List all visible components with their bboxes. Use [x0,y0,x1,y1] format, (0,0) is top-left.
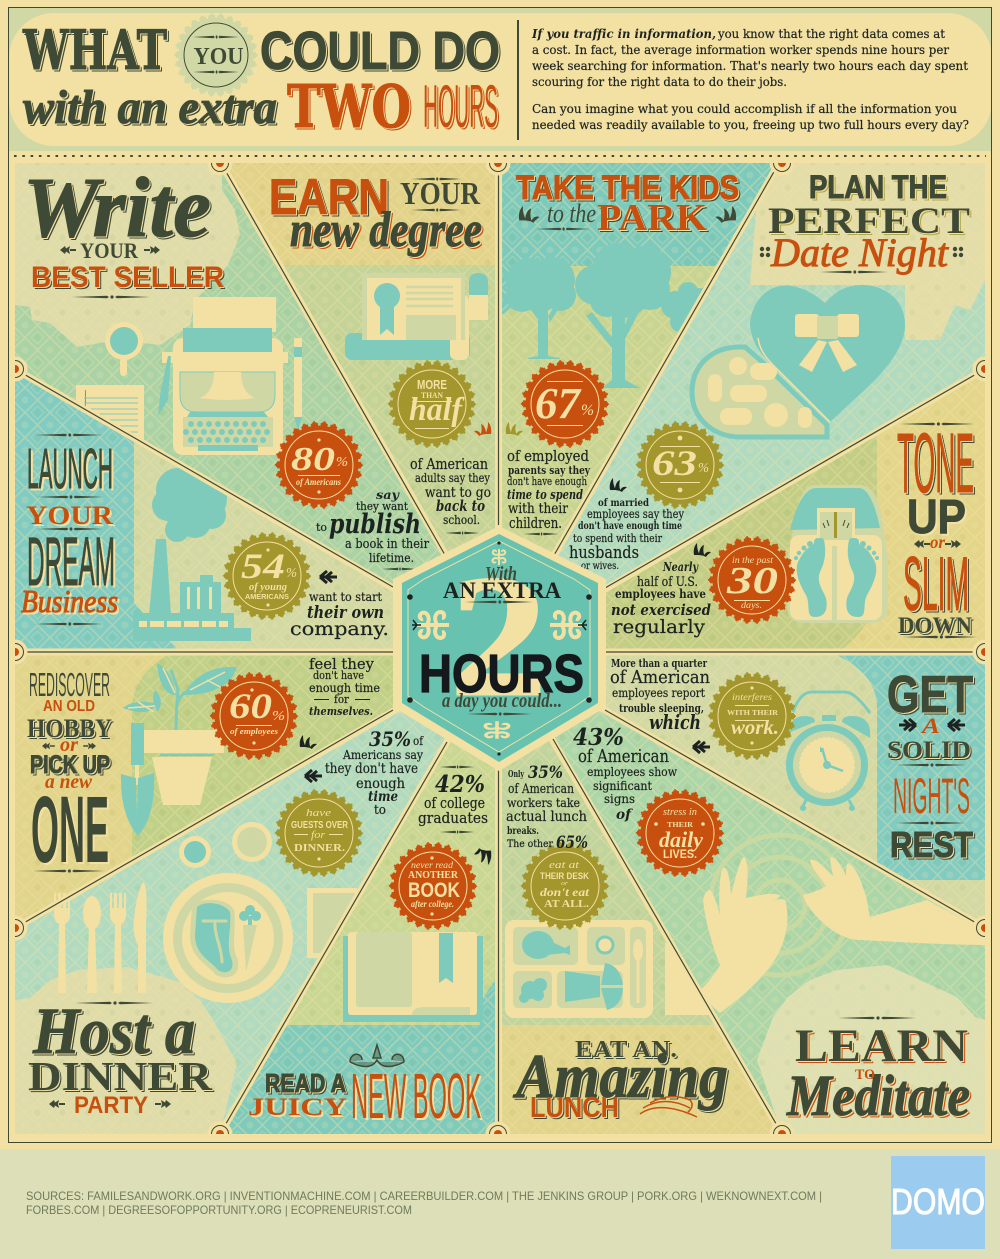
heading: write your best seller [23,159,224,299]
icon: glass [307,888,358,958]
stat text: time for themselves: feel they [309,655,375,673]
badge: have guests over for dinner: for [311,829,326,841]
intro text block: Can you imagine what you could accomplish if all the information you [532,101,957,116]
stat text: americans dinner guests: Americans say [342,748,423,762]
stat text: college graduates: graduates [418,809,488,827]
heading: host a dinner party: DINNER [28,1053,212,1099]
heading: take the kids to the park: PARK [597,197,707,239]
badge: eat at their desk: AT ALL. [544,898,589,910]
stat text: publish a book: say [376,488,400,502]
stat text: time to spend [507,447,590,536]
heading: rediscover an old hobby: or [60,734,78,756]
heading: write your best seller: Write [23,159,211,255]
stat text: time to spend: don't have enough [507,475,587,488]
panel: launch your dream business: DREAM [27,523,115,600]
badge: 80%: 80 [291,441,335,478]
stat text: time for themselves: themselves. [309,705,373,718]
title: what you could do with an extra two hours: with an extra [23,81,277,134]
stat text: publish a book: publish [329,509,421,540]
stat text: start their own company: want to start [309,590,382,604]
heading: plan the perfect date night: Date Night [770,230,949,275]
stat text: college graduates: 42% [435,771,485,798]
badge: you: YOU [194,44,244,70]
heading: read a juicy new book: JUICY [248,1094,347,1121]
stat text: actual lunch breaks: actual lunch [506,809,587,825]
arrow: pointing to dinner badge [305,770,322,782]
badge: never read another book: never read [411,860,454,870]
badge: have guests over for dinner: DINNER. [294,842,345,854]
heading: take the kids to the park [516,169,739,239]
badge: never read another book: ANOTHER [408,870,459,881]
badge: eat at their desk [522,842,608,930]
hub text [419,563,584,716]
badge: eat at their desk: eat at [549,859,580,871]
stat text: not exercised regularly: not exercised [611,601,711,619]
intro text block: week searching for information. That's nearly two hours each day spent [532,58,968,73]
sources text [26,1189,822,1217]
hub text: HOURS [419,644,584,704]
heading: host a dinner party: PARTY [74,1092,148,1119]
stat text: college graduates: of college [424,794,485,812]
icon: scroll ornament [350,1045,404,1067]
badge: in the past 30 days [708,536,796,624]
heading: get a solid night's rest: SOLID [887,737,971,764]
panel: rediscover an old hobby [27,655,380,883]
badge: more than half [388,360,476,448]
stat text: husbands or wives: to spend with their [573,532,663,545]
heading: eat an amazing lunch: Amazing [512,1043,728,1111]
panel: launch your dream business [21,433,389,641]
stat text: back to school: of American [410,455,488,473]
stat text: not exercised regularly: employees have [615,587,706,601]
stat text: actual lunch breaks [506,763,588,853]
stat text: trouble sleeping: trouble sleeping, [619,702,704,715]
heading: earn your new degree: YOUR [400,175,481,211]
stat text: back to school [410,455,491,535]
stat text: actual lunch breaks: breaks. [507,826,539,837]
heading: take the kids to the park: TAKE THE KIDS [516,169,739,207]
footer band [0,1149,1000,1259]
heading: take the kids to the park: to the [547,199,596,228]
stat text: show stress: of [616,807,634,823]
badge: stress in their daily lives: LIVES. [663,847,697,861]
stat text: show stress: of American [578,746,669,767]
stat text: trouble sleeping: of American [610,667,710,688]
intro text block [531,26,969,132]
icon: heart chocolate box [692,285,905,437]
stat text: publish a book: a book in their [345,537,430,552]
badge: more than half: THAN [421,391,443,400]
stat text: time for themselves: for [334,693,350,706]
title: what you could do with an extra two hours: TWO [287,72,411,141]
hub text: AN EXTRA [443,578,561,603]
heading: host a dinner party: Host a [32,995,195,1068]
icon: potted plant and trowel [121,663,237,836]
badge: 80%: % [336,455,348,470]
badge: never read another book: after college. [411,899,454,909]
stat text: not exercised regularly [611,560,711,638]
stat text: time for themselves: enough time [309,681,380,695]
stat text: trouble sleeping: which [649,710,701,734]
stat text: time to spend: time to spend [507,488,583,503]
heading: plan the perfect date night: PLAN THE [809,169,947,205]
heading: launch your dream business: Business [21,583,118,619]
big numeral 2: 2 [450,541,547,732]
badge: 54% of young americans: % [286,566,297,581]
stat text: americans dinner guests: time [368,789,398,805]
heading: get a solid night's rest: REST [890,824,973,865]
intro text block: scouring for the right data to do their jobs. [532,74,787,89]
hub text: a day you could... [442,690,562,712]
intro text block: a cost. In fact, the average information worker spends nine hours per [532,42,949,57]
panel: read a juicy new book [248,765,491,1132]
stat text: show stress: employees show [587,764,677,779]
heading: rediscover an old hobby: PICK UP [30,751,110,779]
stat text: americans dinner guests: they don't have [325,761,418,777]
badge: interferes with their work: WITH THEIR [727,708,779,717]
stat text: show stress: 43% [573,724,624,751]
intro text block: you know that the right data comes at [717,26,945,41]
badge: eat at their desk: THEIR DESK [540,871,589,882]
badge: 67%: 67 [535,379,582,428]
badge: 60% of employees: % [272,709,285,724]
stat text: trouble sleeping [610,657,710,734]
icon: lunch tray [505,920,715,1018]
icon: open book [343,932,483,1022]
central hexagon: with an extra 2 hours a day you could [393,526,606,771]
title: what you could do with an extra two hours [22,14,500,141]
icon: typewriter [158,297,288,455]
stat text: show stress [573,724,677,823]
header band [8,8,992,161]
panel: plan the perfect date night [569,169,970,572]
badge: never read another book: BOOK [408,879,460,902]
stat text: back to school: want to go [425,485,491,501]
title: what you could do with an extra two hours: WHAT [22,18,167,82]
hub text: With [485,563,517,585]
stat text: time to spend: of employed [507,447,589,465]
stat text: americans dinner guests: of [413,734,424,748]
stat text: back to school: adults say they [415,471,490,485]
panel: rediscover an old hobby: ONE [31,777,109,883]
panel: tone up or slim down [611,416,978,639]
text: HOURS [423,73,498,140]
heading: earn your new degree [269,169,482,257]
logo: domo [891,1156,985,1249]
badge: stress in their daily lives: stress in [663,807,697,818]
heading: rediscover an old hobby: a new [45,771,93,793]
heading: tone up or slim down: UP [907,491,966,544]
badge: 54% of young americans [224,532,310,620]
stat text: publish a book: lifetime. [369,551,414,565]
stat text: back to school: school. [443,513,480,527]
background ornament pattern [15,163,985,1134]
heading: write your best seller: BEST SELLER [31,261,224,294]
icon: orange swoosh [640,1097,697,1117]
stat text: college graduates [418,765,488,834]
heading: read a juicy new book: READ A [265,1068,346,1098]
heading: plan the perfect date night: PERFECT [768,201,970,242]
badge: interferes with their work: work. [731,717,779,739]
icon: alarm clock [786,692,870,811]
stat text: husbands or wives: husbands [569,543,639,563]
stat text: publish a book: they want [356,500,409,513]
stat text: publish a book [316,488,430,571]
badge: 80% [276,422,362,508]
badge: eat at their desk: or [561,881,569,887]
stat text: husbands or wives: don't have enough time [578,520,682,532]
arrow: pointing to badge text [693,741,710,753]
badge: 63%: 63 [652,443,697,483]
icon: factory with smoke [133,468,251,641]
badge: have guests over for dinner: GUESTS OVER [291,820,349,831]
stat text: time to spend: children. [509,514,562,532]
badge: 60% of employees [210,672,298,760]
spoke end markers [3,151,997,1146]
heading: write your best seller: YOUR [80,238,139,263]
badge: eat at their desk: don't eat [540,885,590,899]
heading: launch your dream business: YOUR [26,501,113,530]
badge: in the past 30 days: days. [741,600,762,610]
badge: interferes with their work: interferes [732,692,773,702]
icon: pencil [294,338,302,430]
stat text: not exercised regularly: half of U.S. [637,575,698,590]
panel: rediscover an old hobby: REDISCOVER [29,666,110,703]
stat text: actual lunch breaks: workers take [507,795,580,810]
heading: learn to meditate: Meditate [786,1063,970,1128]
stat text: show stress: significant [593,778,652,793]
heading: read a juicy new book [248,1045,481,1132]
badge: in the past 30 days: in the past [732,555,774,565]
stat text: americans dinner guests: to [374,803,386,818]
intro text block: If you traffic in information, [531,26,716,41]
icon: olive fan ornament [506,422,523,436]
stat text: actual lunch breaks: of American [508,782,575,797]
badge: 63% [636,422,724,508]
text: NEW BOOK [351,1060,481,1132]
title: what you could do with an extra two hours: COULD DO [260,21,500,81]
stat text: start their own company [290,590,389,640]
stat text: americans dinner guests: enough [356,776,405,792]
heading: launch your dream business [21,433,118,626]
stat text: americans dinner guests [325,727,424,818]
badge: have guests over for dinner [276,790,362,876]
heading: rediscover an old hobby: AN OLD [43,698,95,715]
stat text: not exercised regularly: Nearly [662,560,699,574]
stat text: time for themselves [309,655,380,718]
divider rule beside intro [517,20,519,140]
badge: 67%: % [581,402,594,419]
intro text block: needed was readily available to you, freeing up two full hours every day? [532,117,969,132]
icon: dinner plate with steak [163,873,293,1003]
badge: 67% [522,360,608,448]
heading: host a dinner party [28,995,212,1119]
flourishes [412,549,587,739]
stat text: time to spend: with their [508,501,568,517]
stat text: actual lunch breaks: Only [508,770,525,780]
heading: learn to meditate: LEARN [795,1020,968,1072]
badge: never read another book [390,842,476,930]
sources text: SOURCES: FAMILESANDWORK.ORG | INVENTIONMACHINE.COM | CAREERBUILDER.COM | THE JENKINS GROUP | PORK.ORG | WEKNOWNEXT.COM | [26,1189,822,1203]
spokes between panels [15,163,985,1134]
panel: launch your dream business: LAUNCH [27,437,113,501]
badge: more than half: MORE [417,377,447,392]
stat text: time for themselves: don't have [313,669,364,682]
icon: meditating hands [698,835,985,1013]
badge: 54% of young americans: of young [249,582,287,593]
stat text: husbands or wives: employees say they [587,507,684,521]
heading: tone up or slim down: or [930,532,946,552]
panel: write your best seller [23,159,430,571]
stat text: time to spend: parents say they [508,464,590,477]
icon: cutlery [54,882,147,993]
badge: 60% of employees: 60 [229,686,272,726]
stat text: publish a book: to [316,521,327,534]
stat text: not exercised regularly: regularly [613,616,705,638]
badge: 54% of young americans: AMERICANS [245,592,289,601]
heading: tone up or slim down [897,416,978,639]
panel: take the kids to the park [506,169,739,536]
stat text: start their own company: their own [307,603,384,623]
stat text: actual lunch breaks: The other [507,838,554,850]
badge: have guests over for dinner: have [306,807,331,819]
heading: get a solid night's rest [887,666,973,865]
heading: learn to meditate: TO [855,1067,875,1083]
panel: get a solid night's rest [610,657,973,865]
panel: host a dinner party [28,727,424,1119]
panel: earn your new degree [269,169,491,535]
heading: plan the perfect date night [760,169,970,275]
stat text: show stress: signs [604,791,635,806]
stat text: actual lunch breaks: 65% [556,833,588,853]
heading: rediscover an old hobby [27,666,112,883]
heading: get a solid night's rest: GET [887,666,973,724]
icon: side plates [179,822,272,868]
heading: eat an amazing lunch: LUNCH [530,1092,619,1124]
heading: earn your new degree: EARN [269,169,389,225]
heading: tone up or slim down: DOWN [898,613,972,638]
panel: eat an amazing lunch [505,763,728,1124]
stat text: start their own company: company. [290,618,389,640]
badge: stress in their daily lives: daily [659,827,703,852]
icon: bathroom scale with feet [787,485,888,623]
icon: dark fan ornament [300,735,317,749]
panel: learn to meditate [573,724,985,1128]
stat text: americans dinner guests: 35% [369,727,411,751]
icon: dark fan ornament [610,478,627,492]
heading: rediscover an old hobby: HOBBY [27,714,112,743]
icon: dark fan ornament [474,848,491,865]
stat text: husbands or wives: or wives. [581,561,619,572]
stat text: husbands or wives [569,497,684,572]
badge: stress in their daily lives: THEIR [667,820,694,829]
badge: 80%: of Americans [296,478,341,488]
icon: notebook page [76,385,144,440]
badge: 54% of young americans: 54 [241,546,285,586]
icon: magnifying glass [105,322,143,376]
icon: diploma [345,273,488,360]
icon: dark fan ornament [694,543,711,557]
badge: you [175,14,257,96]
stat text: trouble sleeping: More than a quarter [611,657,707,670]
stat text: actual lunch breaks: 35% [528,763,563,783]
heading: learn to meditate [786,1016,970,1128]
dotted separator [14,155,986,157]
icon: trees [506,243,712,388]
badge: stress in their daily lives [636,790,724,876]
badge: 63%: % [698,461,709,476]
arrow: pointing to badge [320,571,337,583]
stat text: back to school: back to [436,497,485,515]
stat text: trouble sleeping: employees report [612,686,705,700]
heading: eat an amazing lunch: EAT AN. [575,1037,677,1063]
badge: 60% of employees: of employees [230,726,279,736]
heading: get a solid night's rest: A [920,713,940,738]
panel backgrounds [15,163,990,1142]
sources text: FORBES.COM | DEGREESOFOPPORTUNITY.ORG | ECOPRENEURIST.COM [26,1203,412,1217]
icon: orange fan ornament [474,422,491,436]
badge: in the past 30 days: 30 [726,560,778,602]
logo: domo: DOMO [891,1181,985,1222]
badge: interferes with their work [708,672,796,760]
badge: more than half: half [409,392,465,428]
heading: earn your new degree: new degree [290,201,482,257]
stat text: husbands or wives: of married [598,497,650,509]
